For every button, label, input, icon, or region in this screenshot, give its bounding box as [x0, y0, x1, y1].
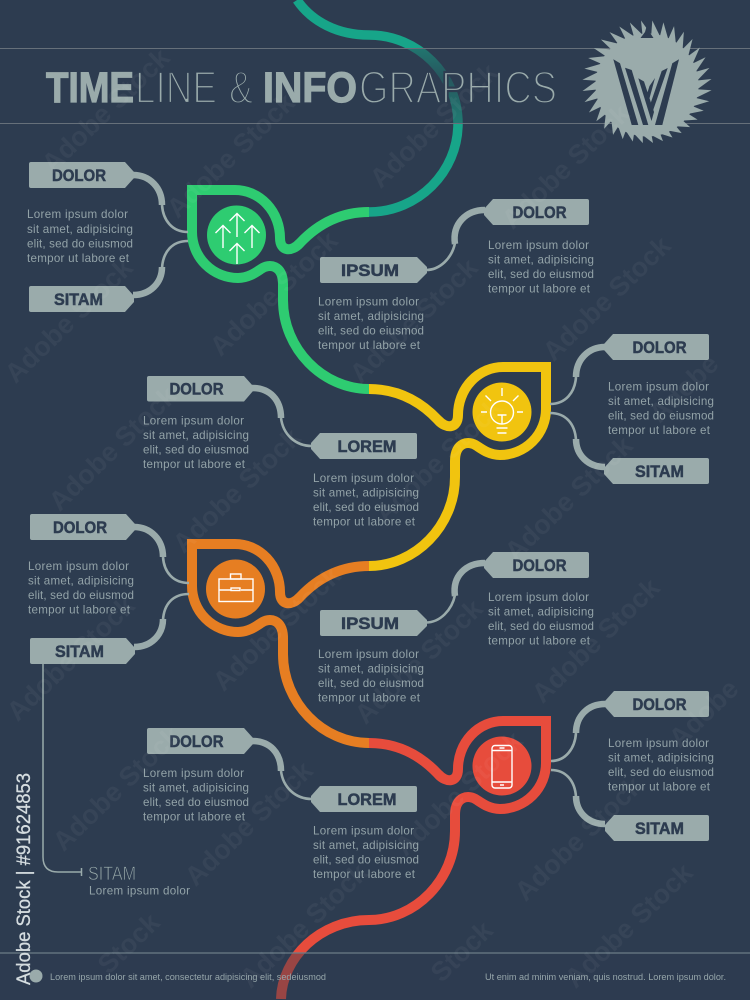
sitam callout label: [88, 864, 190, 898]
title: GRAPHICS: [359, 62, 557, 113]
timeline segment 4: red leaf: [369, 721, 546, 920]
tag: sitam: SITAM: [55, 643, 104, 661]
watermark: Adobe Stock: [0, 252, 139, 389]
watermark: Adobe Stock: [496, 98, 636, 235]
text block: dolor left middle: [143, 414, 249, 471]
text block: ipsum upper: sit amet, adipisicing: [318, 310, 424, 323]
text block: leaf 3 left: elit, sed do eiusmod: [28, 589, 134, 602]
tag: dolor: DOLOR: [632, 339, 687, 357]
tag: dolor: DOLOR: [512, 557, 567, 575]
connectors and tags: ipsum to dolor lower: [320, 552, 589, 636]
tag: dolor: DOLOR: [632, 696, 687, 714]
watermark: Adobe: [643, 349, 724, 428]
watermark: Adobe Stock: [559, 857, 699, 994]
title: [46, 62, 557, 113]
watermark: Adobe Stock: [204, 225, 344, 362]
watermark: Adobe Stock: [499, 430, 639, 567]
tag: dolor: [30, 514, 135, 540]
tag: sitam: SITAM: [635, 463, 684, 481]
text block: ipsum upper: [318, 296, 424, 352]
text block: lorem upper: sit amet, adipisicing: [313, 486, 419, 500]
connectors and tags: leaf 2 right: [550, 334, 709, 484]
tag: dolor: [605, 691, 709, 717]
text block: dolor upper right: tempor ut labore et: [488, 282, 591, 296]
tag: ipsum: IPSUM: [341, 615, 399, 633]
watermark: Adobe Stock: [364, 57, 504, 194]
logo badge: [582, 20, 712, 143]
connectors and tags: leaf 4 right: [551, 691, 709, 841]
sitam callout leader line: [43, 664, 82, 876]
watermark: Adobe Stock: [36, 42, 176, 179]
watermark: Adobe Stock: [349, 593, 489, 730]
watermark: Adobe Stock: [47, 720, 187, 857]
text block: leaf 2 right: tempor ut labore et: [608, 424, 711, 437]
sitam callout label: SITAM: [88, 864, 136, 885]
text block: leaf 1 left: Lorem ipsum dolor: [27, 208, 128, 221]
watermark: Adobe Stock: [1, 590, 141, 727]
tag: sitam: [29, 286, 134, 312]
tag: lorem: LOREM: [338, 438, 396, 456]
text block: lorem upper: tempor ut labore et: [313, 516, 416, 528]
text block: dolor left middle: elit, sed do eiusmod: [143, 444, 249, 456]
title: TIME: [46, 64, 134, 112]
footer: Ut enim ad minim veniam, quis nostrud. Lorem ipsum dolor.: [485, 972, 726, 983]
text block: dolor lower right: tempor ut labore et: [488, 634, 591, 648]
footer: [30, 970, 726, 983]
tag: lorem: [311, 433, 417, 459]
tag: sitam: [604, 458, 709, 484]
sitam callout label: Lorem ipsum dolor: [89, 884, 190, 898]
footer: Lorem ipsum dolor sit amet, consectetur adipisicing elit, sedeiusmod: [50, 972, 326, 983]
watermark: Adobe Stock: [344, 252, 484, 389]
text block: dolor left middle: Lorem ipsum dolor: [143, 414, 244, 428]
text block: dolor left lower: [143, 767, 249, 824]
watermark: Adobe Stock: [207, 560, 347, 697]
watermark: Adobe Stock: [369, 392, 509, 529]
text block: dolor upper right: sit amet, adipisicing: [488, 254, 594, 266]
text block: dolor left lower: elit, sed do eiusmod: [143, 796, 249, 809]
connectors and tags: dolor to lorem upper: [147, 376, 417, 459]
text block: dolor upper right: [488, 239, 594, 296]
watermark: Stock: [425, 915, 499, 988]
tag: dolor: DOLOR: [52, 167, 106, 185]
watermark: Adobe Stock: [179, 755, 319, 892]
text block: leaf 1 left: [27, 208, 133, 265]
title: INFO: [263, 64, 357, 112]
text block: lorem upper: Lorem ipsum dolor: [313, 472, 414, 485]
text block: ipsum lower: sit amet, adipisicing: [318, 662, 424, 676]
watermark: Adobe Stock: [161, 87, 301, 224]
text block: dolor left lower: Lorem ipsum dolor: [143, 767, 244, 780]
tag: sitam: SITAM: [635, 820, 684, 838]
timeline end: red tail: [281, 920, 369, 999]
tag: sitam: [605, 815, 709, 841]
watermark: Adobe Stock: [509, 770, 649, 907]
text block: lorem upper: [313, 472, 419, 528]
text block: ipsum upper: elit, sed do eiusmod: [318, 324, 424, 338]
text block: dolor lower right: elit, sed do eiusmod: [488, 620, 594, 633]
text block: ipsum lower: Lorem ipsum dolor: [318, 648, 419, 661]
text block: dolor left middle: tempor ut labore et: [143, 458, 246, 471]
watermark: Adobe Stock: [234, 857, 374, 994]
text block: ipsum lower: tempor ut labore et: [318, 692, 421, 704]
watermark: Stock: [92, 907, 166, 980]
tag: ipsum: [320, 610, 427, 636]
title: &: [229, 62, 253, 113]
text block: leaf 2 right: elit, sed do eiusmod: [608, 410, 714, 422]
text block: leaf 4 right: tempor ut labore et: [608, 780, 711, 794]
connectors and tags: dolor to lorem lower: [147, 728, 417, 812]
text block: dolor lower right: [488, 591, 594, 648]
adobe stock id vertical text: Adobe Stock | #91624853: [14, 773, 35, 985]
text block: dolor upper right: Lorem ipsum dolor: [488, 239, 589, 252]
tag: dolor: [484, 552, 589, 578]
timeline segment 2: yellow leaf: [369, 367, 546, 566]
text block: leaf 3 left: Lorem ipsum dolor: [28, 560, 129, 573]
tag: dolor: DOLOR: [170, 380, 224, 398]
text block: leaf 4 right: [608, 737, 714, 794]
watermark: Adobe Stock: [167, 422, 307, 559]
text block: leaf 3 left: [28, 560, 134, 616]
text block: dolor upper right: elit, sed do eiusmod: [488, 268, 594, 281]
tag: dolor: DOLOR: [53, 519, 107, 537]
text block: ipsum upper: Lorem ipsum dolor: [318, 296, 419, 308]
tag: lorem: LOREM: [338, 791, 396, 809]
text block: leaf 3 left: sit amet, adipisicing: [28, 574, 134, 588]
watermark: Adobe Stock: [526, 572, 666, 709]
tag: dolor: DOLOR: [170, 733, 224, 751]
text block: lorem upper: elit, sed do eiusmod: [313, 501, 419, 514]
text block: lorem lower: Lorem ipsum dolor: [313, 824, 414, 838]
tag: ipsum: IPSUM: [341, 262, 399, 280]
watermark: Adobe Stock: [537, 230, 677, 367]
timeline segment 3: orange leaf: [192, 544, 369, 743]
watermark: Adobe Stock: [389, 725, 529, 862]
text block: leaf 1 left: elit, sed do eiusmod: [27, 238, 133, 250]
tag: dolor: [604, 334, 709, 360]
tag: ipsum: [320, 257, 427, 283]
text block: leaf 3 left: tempor ut labore et: [28, 604, 131, 616]
text block: ipsum lower: [318, 648, 424, 704]
text block: leaf 4 right: elit, sed do eiusmod: [608, 766, 714, 779]
watermark: Adobe: [663, 674, 744, 753]
timeline start: teal curve: [297, 0, 458, 212]
icon: light bulb: [472, 382, 532, 442]
title: LINE: [135, 62, 217, 113]
text block: leaf 1 left: tempor ut labore et: [27, 252, 130, 265]
tag: dolor: [147, 376, 253, 402]
text block: ipsum lower: elit, sed do eiusmod: [318, 677, 424, 690]
text block: leaf 2 right: [608, 380, 714, 437]
text block: ipsum upper: tempor ut labore et: [318, 339, 421, 352]
tag: dolor: [29, 162, 134, 188]
connectors and tags: ipsum to dolor upper: [320, 199, 589, 283]
text block: dolor left lower: sit amet, adipisicing: [143, 782, 249, 794]
text block: dolor left lower: tempor ut labore et: [143, 810, 246, 824]
connectors and tags: leaf 1 left: [29, 162, 188, 312]
text block: leaf 4 right: Lorem ipsum dolor: [608, 737, 709, 750]
tag: dolor: [147, 728, 253, 754]
tag: sitam: [30, 638, 135, 664]
text block: lorem lower: [313, 824, 419, 881]
icon: arrows up: [207, 206, 266, 264]
tag: dolor: DOLOR: [512, 204, 567, 222]
connectors and tags: leaf 3 left: [30, 514, 189, 664]
text block: leaf 4 right: sit amet, adipisicing: [608, 752, 714, 764]
timeline segment 1: green leaf: [192, 190, 369, 389]
text block: dolor lower right: sit amet, adipisicing: [488, 606, 594, 618]
text block: leaf 1 left: sit amet, adipisicing: [27, 223, 133, 236]
tag: lorem: [311, 786, 417, 812]
text block: dolor lower right: Lorem ipsum dolor: [488, 591, 589, 604]
icon: smartphone: [472, 736, 532, 796]
text block: lorem lower: elit, sed do eiusmod: [313, 854, 419, 866]
tag: dolor: [484, 199, 589, 225]
text block: lorem lower: tempor ut labore et: [313, 868, 416, 881]
watermark: Adobe Stock: [43, 380, 183, 517]
text block: dolor left middle: sit amet, adipisicing: [143, 429, 249, 442]
tag: sitam: SITAM: [54, 291, 103, 309]
text block: leaf 2 right: sit amet, adipisicing: [608, 395, 714, 408]
text block: leaf 2 right: Lorem ipsum dolor: [608, 380, 709, 394]
icon: briefcase: [206, 560, 265, 618]
text block: lorem lower: sit amet, adipisicing: [313, 839, 419, 852]
